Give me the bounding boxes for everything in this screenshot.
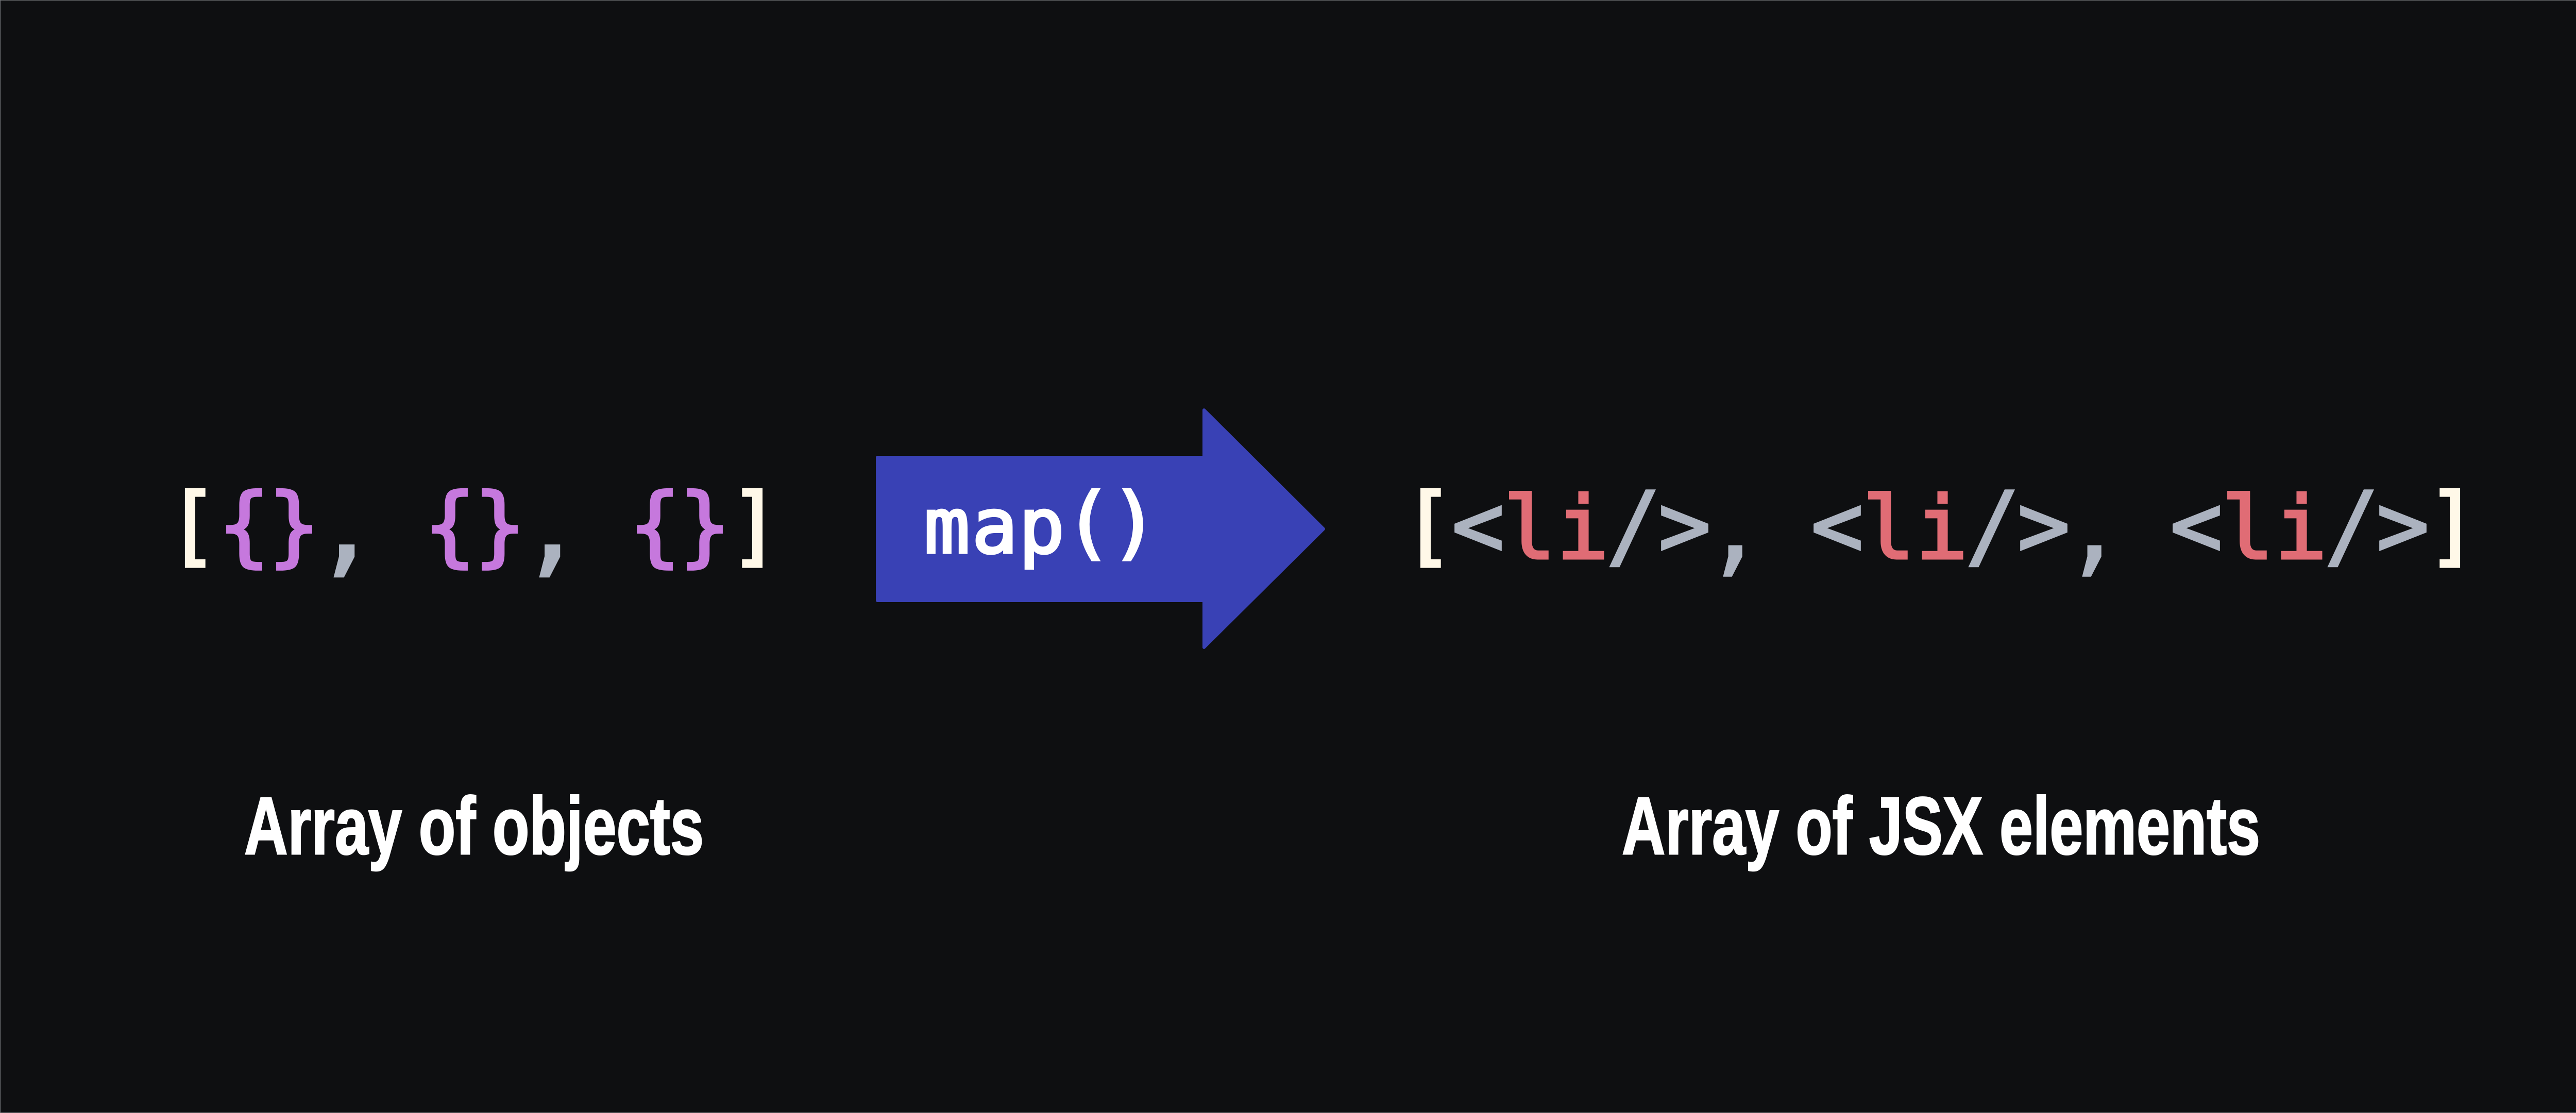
code: array of objects: [] xyxy=(166,475,781,576)
arrow: map() xyxy=(877,410,1324,647)
caption: array of objects: Array of objects xyxy=(244,781,704,871)
arrow label: map(): map xyxy=(924,482,1065,571)
code: array of objects: ,, xyxy=(314,464,584,587)
code: array of objects: {}{}{} xyxy=(218,475,731,576)
caption: array of JSX elements: Array of JSX elements xyxy=(1622,781,2260,871)
code: array of JSX elements: ,, xyxy=(1703,464,2126,587)
code: array of JSX elements: /// xyxy=(1606,472,2380,580)
arrow label: map(): () xyxy=(1064,476,1158,569)
code: array of JSX elements: lilili xyxy=(1503,478,2327,579)
code: array of JSX elements: [] xyxy=(1402,475,2479,576)
arrow label: map() xyxy=(924,476,1158,571)
code: array of JSX elements: <><><> xyxy=(1452,475,2429,576)
